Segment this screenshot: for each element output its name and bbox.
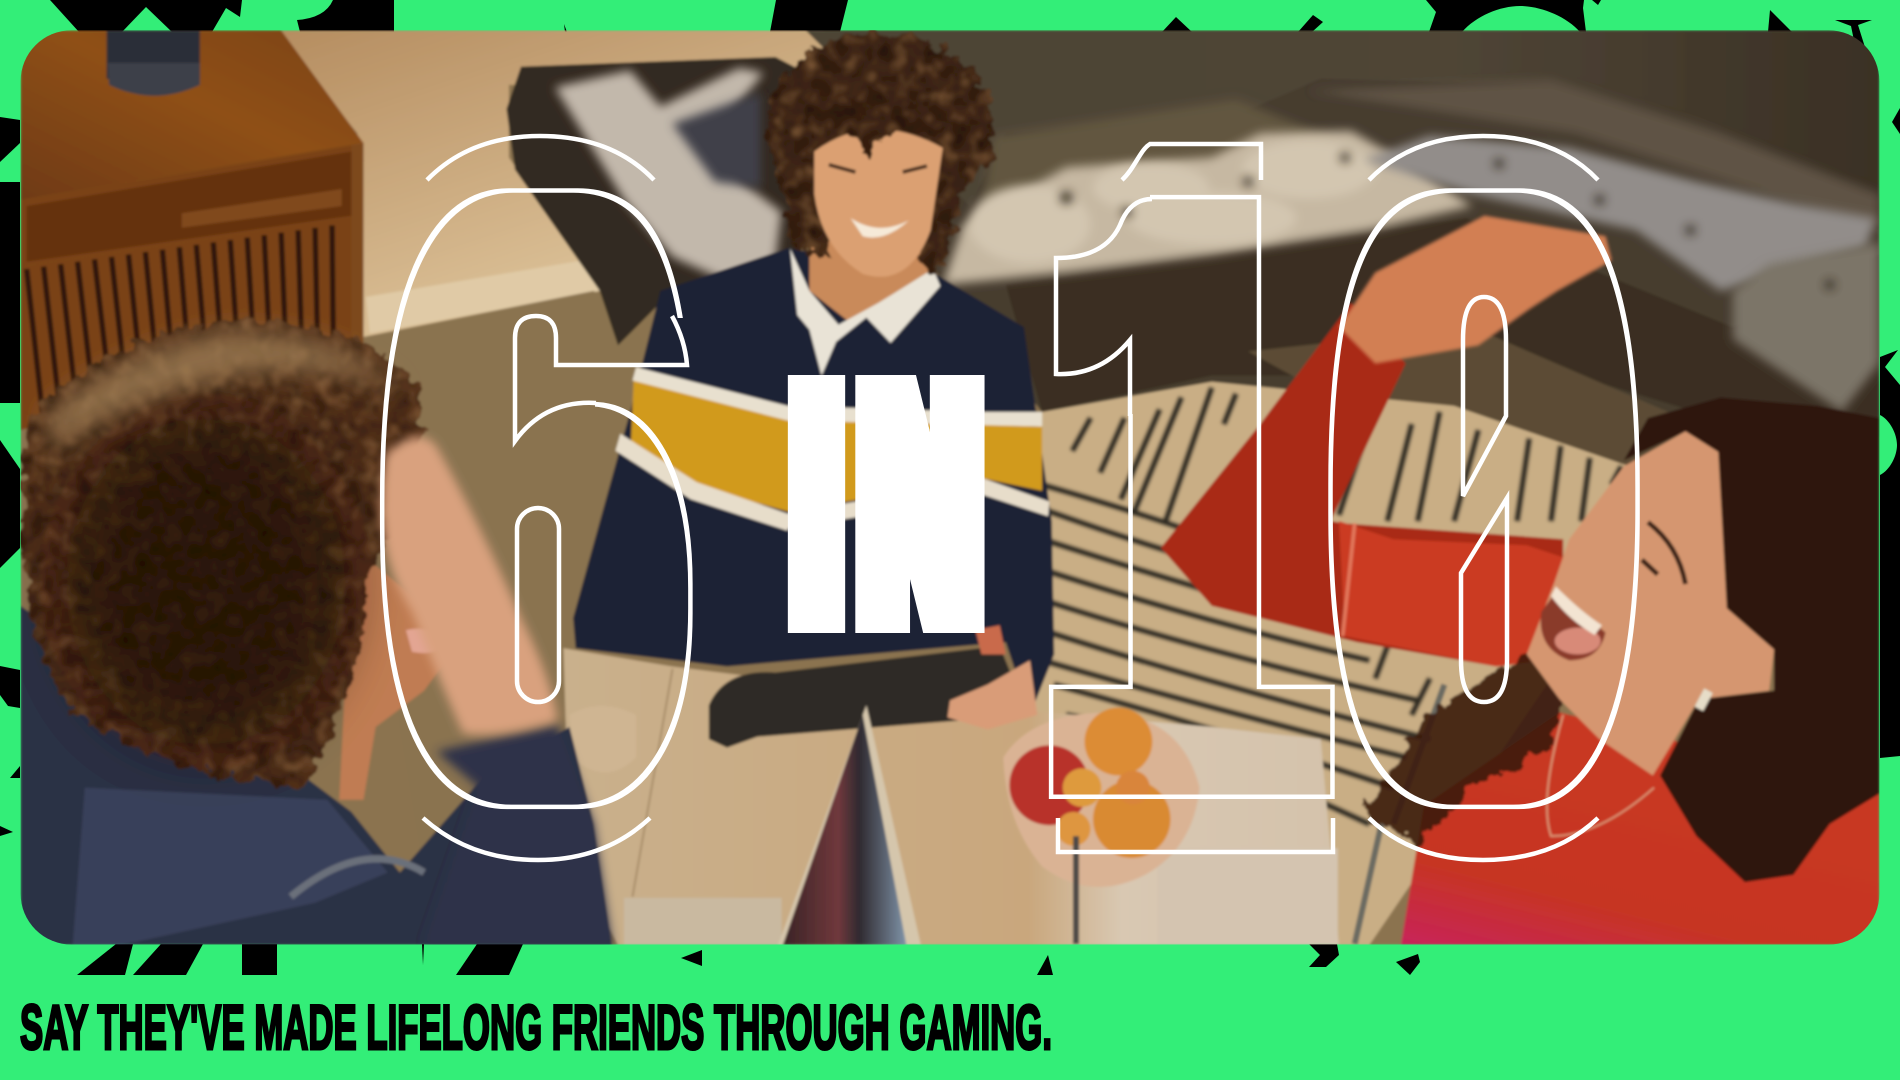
- straw on the table: [1074, 836, 1079, 944]
- right person: face, mouth and neck: [1527, 431, 1774, 836]
- sofa left arm with fluffy pillow: [507, 57, 806, 345]
- centre person: hair: [767, 33, 995, 273]
- right person: raised hand: [1339, 216, 1612, 364]
- lower counter of the 6: [517, 508, 559, 702]
- navy cup on cabinet: [107, 30, 200, 96]
- big numerals: outlined 1: 1: [1054, 29, 1313, 962]
- tufted sofa seat cushions: [943, 131, 1879, 412]
- handheld game console with hand: [709, 625, 1037, 748]
- wall: [273, 30, 824, 339]
- left person: hoodie: [21, 606, 612, 945]
- floor carpet: [362, 290, 595, 340]
- word: IN: IN: [794, 295, 1001, 713]
- echo arcs above and below the 6: [423, 136, 654, 860]
- centre person: face: [812, 91, 948, 277]
- left person: curly hair: [21, 321, 420, 788]
- right person: red sleeve raised: [1161, 303, 1563, 666]
- echo arcs above and below the 0: [1369, 136, 1598, 860]
- white table: [563, 648, 1339, 945]
- left person: raised hand: [381, 437, 557, 735]
- curved flag of the 1: [1056, 199, 1152, 416]
- upper aperture of the 6: [515, 316, 687, 441]
- mouse on table: [570, 706, 636, 772]
- photo: base floor tone: [20, 83, 1776, 944]
- right person: hair: [1363, 397, 1879, 882]
- right person: red top: [1401, 712, 1879, 945]
- sofa back and lower body: [806, 30, 1879, 467]
- wood cabinet: [21, 30, 364, 430]
- laptop: [624, 705, 921, 945]
- caption: SAY THEY'VE MADE LIFELONG FRIENDS THROUGH GAMING.: [20, 993, 1052, 1063]
- striped rug: [1018, 382, 1630, 945]
- broken inner counter of the 0: [1461, 297, 1507, 702]
- big numerals: outlined 6: 6: [396, 31, 676, 965]
- left person: face and neck: [339, 545, 451, 800]
- echo shapes above and below the 1: [1058, 144, 1333, 852]
- centre person: rugby shirt: [573, 212, 1054, 715]
- big numerals: outlined 0: 0: [1343, 30, 1626, 964]
- fruit bowl with apples: [1003, 708, 1200, 887]
